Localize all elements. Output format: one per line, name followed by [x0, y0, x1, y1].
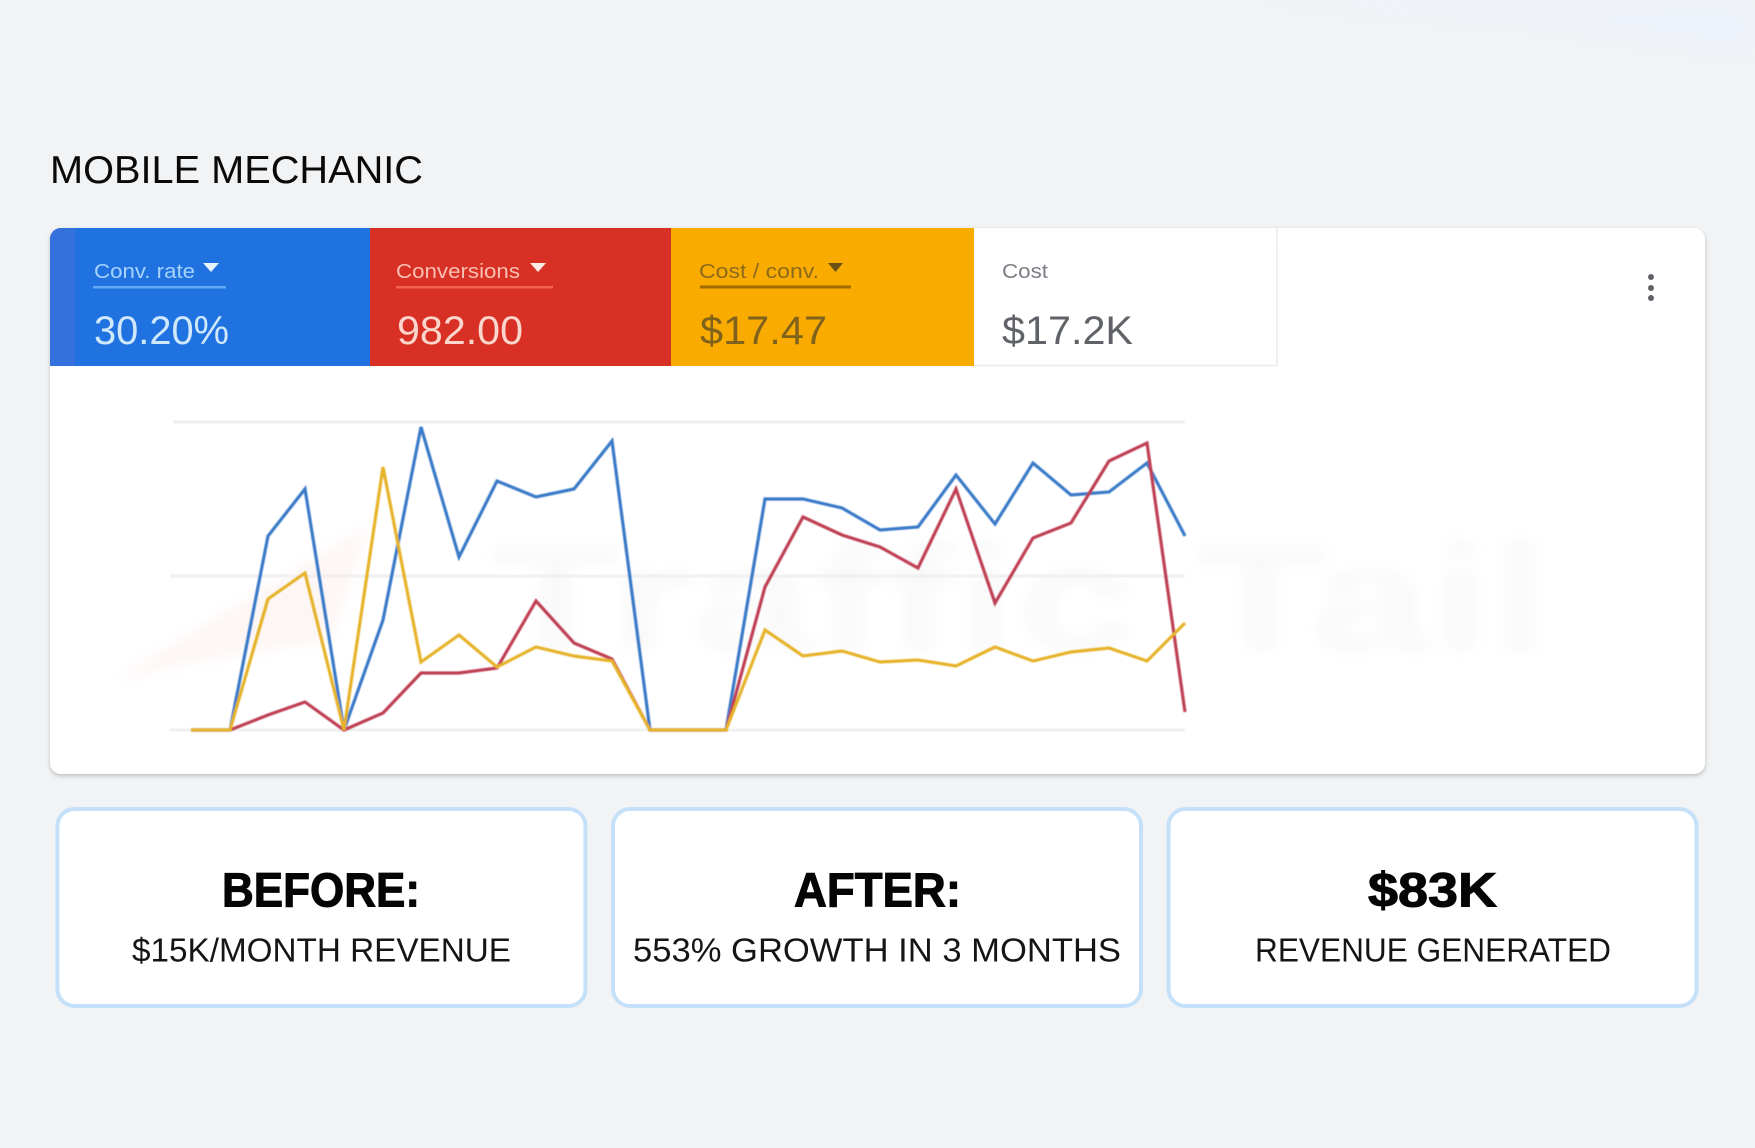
series: blue [191, 427, 1185, 730]
tab: conversions [370, 228, 671, 366]
stat heading: revenue: $83K [1368, 864, 1497, 918]
tab: conv. rate [50, 228, 371, 366]
tab: cost / conv.: $17.47 [700, 309, 827, 353]
stat text: before: $15K/MONTH REVENUE [132, 932, 511, 968]
icon: more menu [1648, 274, 1654, 301]
series: yellow [191, 467, 1185, 730]
tab: cost [974, 228, 1277, 366]
panel: performance dashboard card [50, 228, 1705, 774]
title: MOBILE MECHANIC [50, 149, 423, 192]
series: red [191, 443, 1185, 730]
line chart [170, 422, 1185, 730]
panel: revenue [1168, 809, 1696, 1006]
tab: cost / conv.: Cost / conv. [699, 261, 819, 283]
watermark [115, 514, 1550, 682]
panel: before [58, 809, 586, 1006]
tab: cost: Cost [1002, 261, 1048, 283]
tab: conversions: Conversions [396, 261, 520, 283]
stat heading: before: BEFORE: [222, 864, 420, 918]
stat text: after: 553% GROWTH IN 3 MONTHS [633, 932, 1121, 968]
tab: conv. rate: 30.20% [94, 309, 229, 353]
stat heading: after: AFTER: [794, 864, 961, 918]
tab: conv. rate: Conv. rate [94, 261, 195, 283]
stat text: revenue: REVENUE GENERATED [1255, 932, 1611, 968]
panel: after [613, 809, 1141, 1006]
metric tabs [50, 228, 1277, 366]
tab: conversions: 982.00 [397, 309, 523, 353]
watermark: Traffic Tail [490, 514, 1550, 682]
tab: cost / conv. [671, 228, 974, 366]
tab: cost: $17.2K [1002, 309, 1133, 353]
